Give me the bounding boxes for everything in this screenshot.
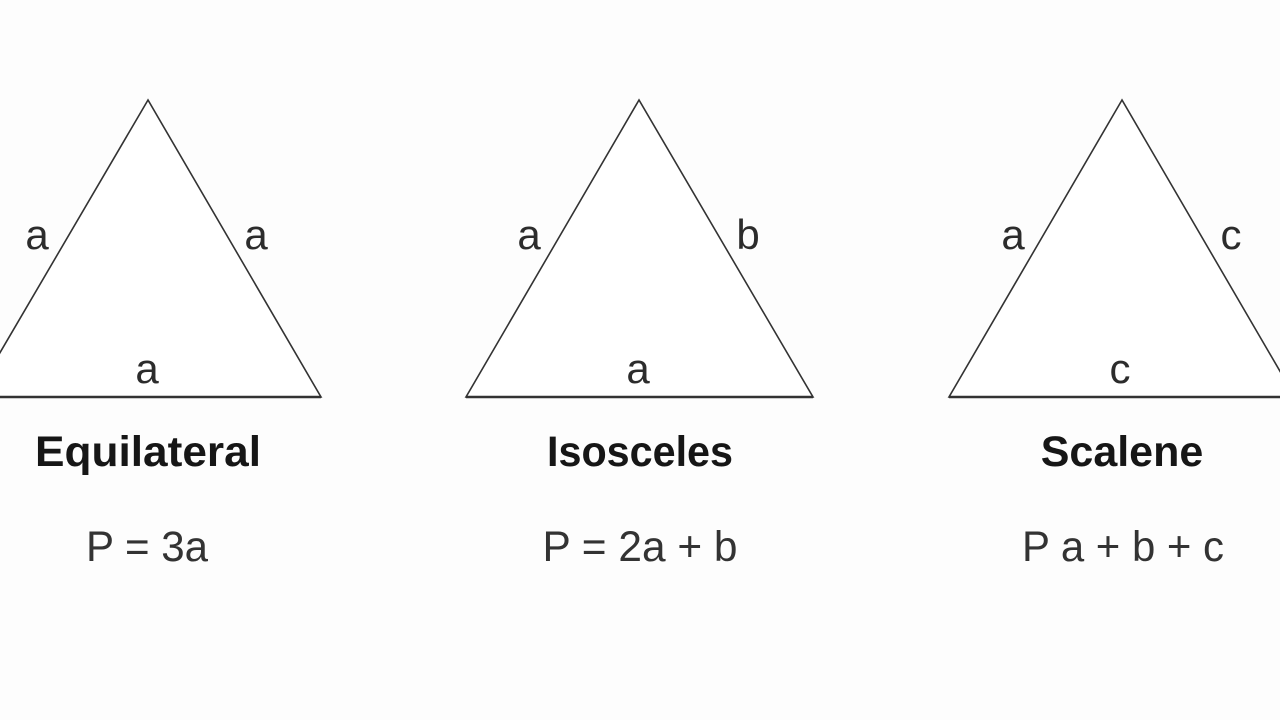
- panel: isosceles triangle: [466, 100, 813, 571]
- side label: right c: c: [1220, 211, 1242, 258]
- side label: base a: a: [626, 345, 650, 392]
- formula: isosceles perimeter: P = 2a + b: [542, 523, 738, 571]
- side label: base a: a: [135, 345, 159, 392]
- triangle outline: scalene: [949, 100, 1280, 397]
- panel: equilateral triangle: [0, 100, 321, 571]
- side label: left a: a: [25, 211, 49, 258]
- formula: equilateral perimeter: P = 3a: [86, 523, 208, 571]
- heading: Scalene: Scalene: [1041, 428, 1203, 476]
- side label: right a: a: [244, 211, 268, 258]
- triangle outline: isosceles: [466, 100, 813, 397]
- side label: base c: c: [1110, 345, 1130, 392]
- panel: scalene triangle: [949, 100, 1280, 571]
- heading: Equilateral: Equilateral: [35, 428, 261, 476]
- triangle outline: equilateral: [0, 100, 321, 397]
- side label: right b: b: [736, 211, 760, 258]
- heading: Isosceles: Isosceles: [547, 428, 733, 476]
- side label: left a: a: [1001, 211, 1025, 258]
- formula: scalene perimeter: P a + b + c: [1022, 523, 1224, 571]
- side label: left a: a: [517, 211, 541, 258]
